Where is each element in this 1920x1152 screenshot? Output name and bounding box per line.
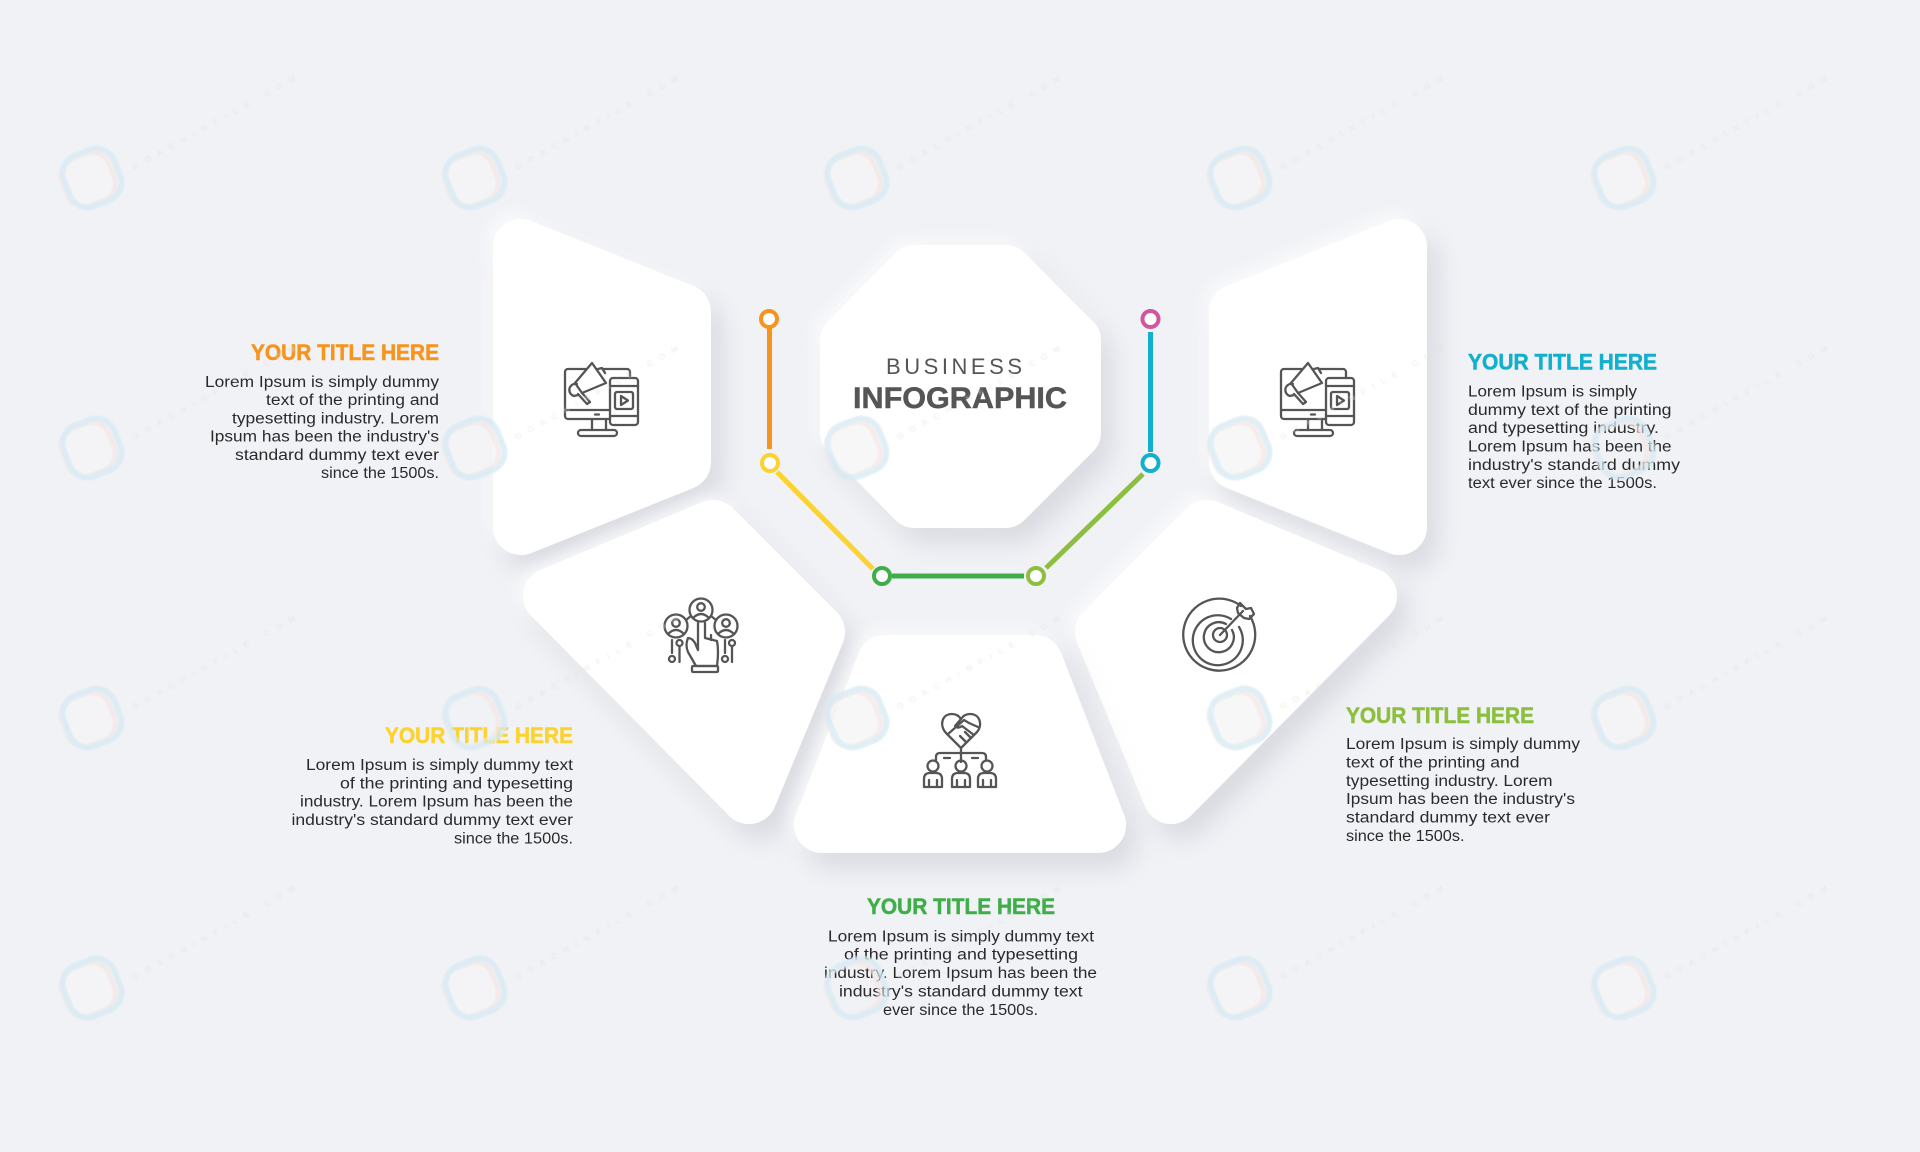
panel: top right pentagon [1237,247,1399,527]
panel: central octagon [848,273,1073,500]
text block: step 2 yellow, lower left: Lorem Ipsum is simply dummy text [306,757,574,774]
heading: business infographic: BUSINESS [886,354,1022,379]
watermark grid: GOACHINFILE.COM [514,614,680,712]
watermark grid: GOACHINFILE.COM [896,614,1062,712]
watermark grid: GOACHINFILE.COM [1663,614,1829,712]
icon: hand selecting people [664,598,738,672]
text block: step 4 lime, lower right: typesetting industry. Lorem [1346,773,1552,790]
text block: step 5 blue, right top: YOUR TITLE HERE [1468,350,1657,374]
icon: megaphone on monitor and phone, left [565,363,638,436]
icon: handshake heart over team [924,714,996,787]
panel: lower right pentagon [1103,528,1369,796]
text block: step 2 yellow, lower left: industry. Lorem Ipsum has been the [300,794,573,810]
connector: coloured timeline [761,311,1158,584]
text block: step 1 orange, left top: Lorem Ipsum is simply dummy [205,374,439,391]
watermark grid: GOACHINFILE.COM [131,884,297,982]
text block: step 3 green, bottom: YOUR TITLE HERE [867,894,1055,919]
watermark grid: GOACHINFILE.COM [1663,74,1829,172]
text block: step 5 blue, right top: and typesetting industry. [1468,420,1659,437]
text block: step 5 blue, right top: dummy text of the printing [1468,402,1672,419]
icon: target with arrow [1183,599,1255,671]
panel: lower left pentagon [551,528,817,796]
text block: step 5 blue, right top: industry's standard dummy [1468,457,1680,474]
text block: step 5 blue, right top: Lorem Ipsum has been the [1468,438,1672,456]
text block: step 3 green, bottom: Lorem Ipsum is simply dummy text [828,928,1095,946]
text block: step 2 yellow, lower left: of the printing and typesetting [340,776,573,792]
watermark grid: GOACHINFILE.COM [1663,884,1829,982]
watermark grid: GOACHINFILE.COM [896,74,1062,172]
watermark grid: GOACHINFILE.COM [514,884,680,982]
text block: step 1 orange, left top: standard dummy text ever [235,447,439,464]
text block: step 4 lime, lower right: YOUR TITLE HERE [1346,703,1534,728]
text block: step 3 green, bottom: industry's standard dummy text [839,983,1083,1000]
watermark grid: GOACHINFILE.COM [1279,614,1445,712]
watermark grid: GOACHINFILE.COM [1279,884,1445,982]
watermark grid: GOACHINFILE.COM [1279,74,1445,172]
panel: bottom trapezoid [822,663,1098,825]
text block: step 2 yellow, lower left: industry's standard dummy text ever [292,812,573,829]
icon: megaphone on monitor and phone, right [1281,363,1354,436]
watermark grid: GOACHINFILE.COM [896,884,1062,982]
text block: step 3 green, bottom: industry. Lorem Ipsum has been the [824,965,1097,982]
text block: step 5 blue, right top: text ever since the 1500s. [1468,475,1657,492]
text block: step 5 blue, right top [1468,350,1680,492]
text block: step 3 green, bottom: of the printing and typesetting [844,947,1078,964]
text block: step 2 yellow, lower left [292,723,574,848]
text block: step 1 orange, left top: typesetting industry. Lorem [232,410,439,428]
watermark grid: GOACHINFILE.COM [131,74,297,172]
watermark grid: GOACHINFILE.COM [1279,344,1445,442]
text block: step 4 lime, lower right: Lorem Ipsum is simply dummy [1346,736,1580,753]
text block: step 3 green, bottom [824,894,1097,1019]
heading: business infographic [853,354,1067,415]
watermark grid: GOACHINFILE.COM [131,614,297,712]
text block: step 1 orange, left top: YOUR TITLE HERE [251,340,439,365]
text block: step 1 orange, left top: text of the printing and [266,392,439,409]
text block: step 1 orange, left top: since the 1500s. [321,465,439,482]
text block: step 4 lime, lower right: standard dummy text ever [1346,810,1550,826]
text block: step 1 orange, left top [205,340,439,482]
text block: step 3 green, bottom: ever since the 1500s. [883,1002,1038,1019]
text block: step 1 orange, left top: Ipsum has been the industry's [210,428,439,446]
text block: step 4 lime, lower right [1346,703,1580,845]
heading: business infographic: INFOGRAPHIC [853,382,1067,415]
watermark grid: GOACHINFILE.COM [514,344,680,442]
watermark grid: GOACHINFILE.COM [1663,344,1829,442]
text block: step 4 lime, lower right: text of the printing and [1346,754,1520,772]
watermark grid: GOACHINFILE.COM [131,344,297,442]
panel: top left pentagon [521,247,683,527]
text block: step 5 blue, right top: Lorem Ipsum is simply [1468,384,1637,400]
text block: step 2 yellow, lower left: YOUR TITLE HERE [385,723,573,748]
text block: step 4 lime, lower right: since the 1500s. [1346,828,1464,845]
text block: step 2 yellow, lower left: since the 1500s. [454,830,573,848]
watermark grid [56,74,1829,1023]
watermark grid: GOACHINFILE.COM [514,74,680,172]
watermark grid: GOACHINFILE.COM [896,344,1062,442]
text block: step 4 lime, lower right: Ipsum has been the industry's [1346,791,1575,808]
